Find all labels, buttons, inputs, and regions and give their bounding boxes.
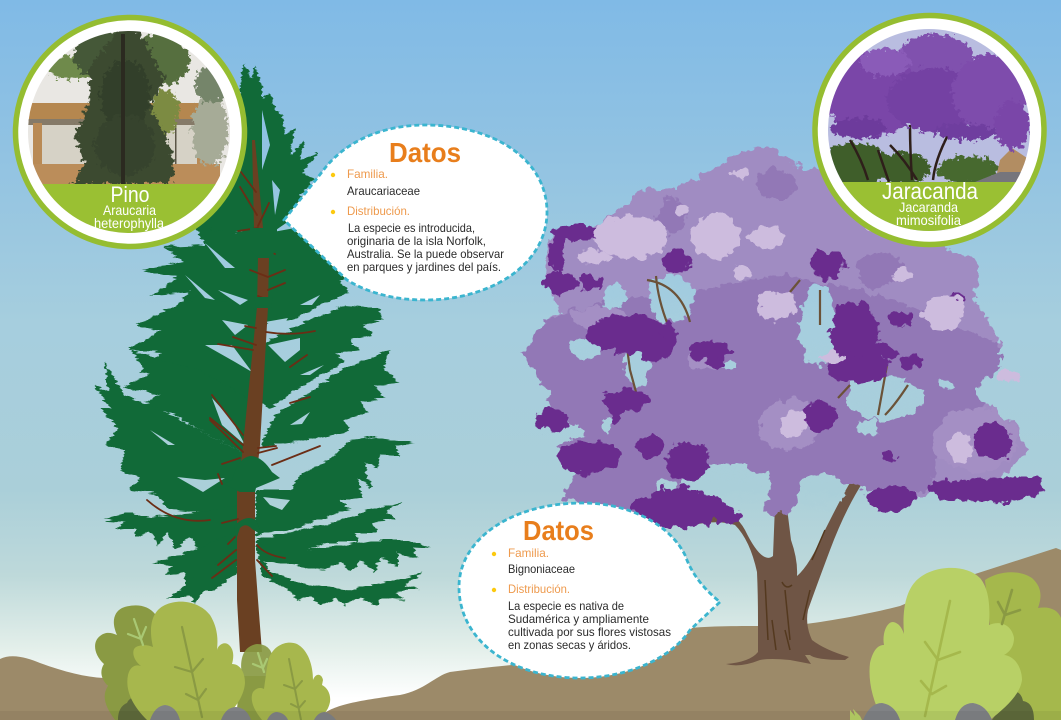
lower stem of small bush	[236, 676, 272, 720]
front bush	[870, 568, 1022, 720]
small bush veins	[284, 659, 305, 720]
rocks	[863, 703, 992, 720]
bullets	[492, 552, 496, 592]
small translucent bush on trunk	[241, 644, 272, 680]
callout: datos jaracanda: Bignoniaceae	[508, 562, 575, 576]
callout: datos pino	[284, 125, 547, 300]
callout: datos jaracanda	[459, 503, 720, 678]
crown: sky holes	[569, 274, 956, 512]
photo: pine and building	[28, 31, 230, 233]
callout: datos pino: en parques y jardines del país.	[347, 260, 501, 274]
callout: datos pino: originaria de la isla Norfolk,	[347, 234, 486, 248]
crown: dark purple patches	[535, 225, 1044, 528]
callout: datos pino: La especie es introducida,	[348, 221, 475, 235]
heading: Datos	[523, 515, 594, 546]
medallion: jaracanda: Jacaranda	[899, 199, 958, 215]
pine foliage bands on trunk	[224, 228, 280, 540]
ground hills	[0, 548, 1061, 720]
medallion ring	[815, 16, 1044, 244]
photo: flowering jacaranda	[828, 29, 1030, 231]
callout: datos jaracanda: Sudamérica y ampliamente	[508, 612, 649, 626]
right small bush	[252, 643, 330, 720]
medallion: jaracanda: mimosifolia	[896, 212, 961, 228]
familia: Familia.	[508, 546, 549, 560]
trunk bark marks	[765, 530, 825, 650]
front left bush	[127, 602, 245, 720]
medallion: pino	[16, 18, 244, 246]
jacaranda tree	[523, 148, 1044, 665]
medallion band	[42, 184, 216, 233]
bubble outline	[284, 125, 547, 300]
callout: datos pino: Araucariaceae	[347, 184, 420, 198]
right bushes	[850, 568, 1061, 720]
crown: light lilac patches	[576, 168, 1019, 464]
heading: Datos	[389, 137, 461, 168]
rocks	[150, 705, 336, 720]
medallion: pino: Araucaria	[103, 202, 156, 218]
front bush veins	[921, 601, 960, 716]
callout: datos jaracanda: en zonas secas y áridos.	[508, 638, 631, 652]
crown: lilac shade right	[572, 306, 1017, 472]
medallion: pino: heterophylla	[94, 215, 164, 231]
front bush veins	[175, 627, 206, 717]
bubble outline	[459, 503, 720, 678]
crown: upper purple mass	[523, 148, 1030, 520]
callout: datos pino: Australia. Se la puede observar	[347, 247, 504, 261]
medallion ring	[16, 18, 244, 246]
back bush veins	[998, 590, 1020, 624]
pine foliage boughs	[93, 63, 433, 606]
dark undergrowth	[118, 698, 160, 720]
back bush veins	[128, 619, 267, 672]
pine trunk	[237, 140, 269, 652]
back bush	[95, 605, 170, 720]
callout: datos jaracanda: cultivada por sus flores vistosas	[508, 625, 671, 639]
dark undergrowth	[992, 692, 1034, 720]
distribucion: Distribución.	[508, 582, 570, 596]
jacaranda trunk	[698, 478, 863, 665]
medallion labels: Jaracanda	[882, 178, 978, 204]
medallion: jaracanda	[815, 16, 1044, 244]
pine tree	[93, 63, 433, 652]
ground shade band	[0, 711, 1061, 720]
grass tuft	[850, 709, 862, 720]
crown: lower shade	[523, 169, 1000, 520]
familia: Familia.	[347, 167, 388, 181]
medallion labels: Pino	[110, 182, 150, 207]
left bushes	[95, 602, 336, 720]
bullets	[331, 173, 335, 214]
distribucion: Distribución.	[347, 204, 410, 218]
pine foliage gaps	[150, 110, 324, 510]
pine branches	[147, 172, 320, 578]
medallion band	[842, 182, 1016, 231]
jacaranda branches	[626, 276, 908, 415]
callout: datos jaracanda: La especie es nativa de	[508, 599, 624, 613]
back bush	[985, 572, 1061, 720]
